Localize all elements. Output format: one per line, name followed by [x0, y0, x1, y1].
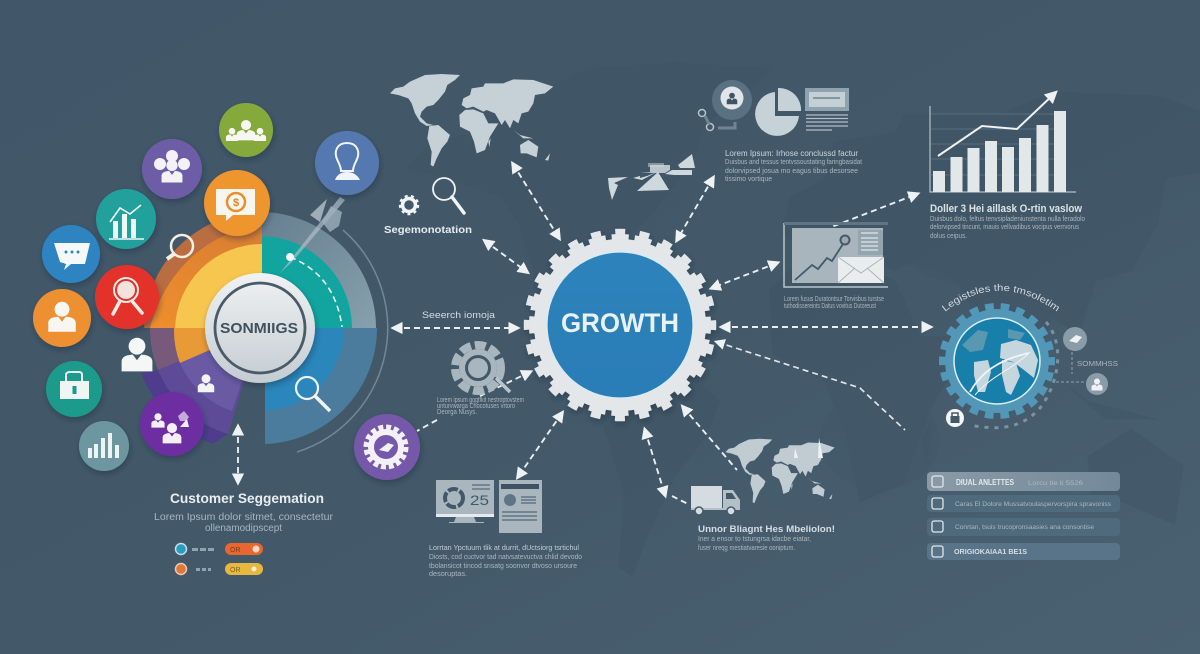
- report text: tissimo vortique: [725, 176, 772, 183]
- icon: lock teal: [46, 361, 102, 417]
- world map top: [390, 74, 553, 167]
- icon: person orange: [33, 289, 91, 347]
- arrow: to lower right: [717, 342, 905, 430]
- magnifier on blue: [296, 377, 330, 411]
- icon: magnifier outline: [433, 178, 464, 213]
- monitor caption: Diosts, cod cuctvor tad natvsatevuctva chlid devodo: [429, 554, 582, 561]
- arrow: vertical left: [237, 427, 239, 482]
- gear caption: Deorga Nusys.: [437, 409, 477, 416]
- icon: monitor: 25: [470, 492, 489, 508]
- dotted ring around globe: [970, 322, 1058, 428]
- report text: Duisbus and tessus tentvssoustating faringbasidat: [725, 159, 862, 166]
- segmentation label: Segemonotation: [384, 224, 472, 236]
- icon: monitor: [436, 480, 494, 523]
- growth label: GROWTH: [561, 308, 679, 338]
- list row 2: Caras El Dolore Mussatvoulaspervorspira spravoniss: [955, 501, 1112, 508]
- map fragment icon: [608, 154, 695, 200]
- chart text: delorvipsed tincunt, mauis vellvadibus vocipus verrvorus: [930, 224, 1079, 231]
- curved title: [945, 291, 1056, 312]
- light beam to bulb: [280, 197, 345, 273]
- arrow: to segmentation: [485, 241, 527, 272]
- report icons: [698, 80, 849, 136]
- central gear: [526, 232, 714, 418]
- left title: Customer Seggemation: [170, 490, 324, 506]
- arrow: to purple gear: [417, 420, 437, 431]
- arrow: to truck: [645, 430, 665, 495]
- icon: pie: [755, 88, 801, 136]
- list row 1: [927, 472, 1120, 491]
- list panel: [927, 472, 1120, 560]
- gear caption: [437, 397, 524, 416]
- globe: [954, 318, 1040, 404]
- map arrows: [794, 438, 823, 458]
- arrow: to bar chart: [834, 194, 917, 246]
- icon: gear purple: [354, 414, 420, 480]
- list row 4: [927, 543, 1120, 560]
- icon: magnifier red: [95, 265, 159, 329]
- report text: Lorem Ipsum: Irhose conclussd factur: [725, 149, 858, 158]
- gear caption: unturvwarga Chocotuses vrtoro: [437, 403, 515, 410]
- list row 1: DIUAL ANLETTES: [956, 478, 1015, 487]
- globe side label: SOMMHSS: [1077, 361, 1118, 368]
- left description: Lorem Ipsum dolor sitmet, consectetur: [154, 512, 334, 523]
- icon: gear with magnifier: [455, 345, 510, 392]
- icon: document: [499, 480, 542, 533]
- envelope text: tuthodissereints Datus vovitus Dutoreust: [784, 303, 876, 310]
- globe gear: Legistsles the tmsoletim: [942, 284, 1059, 312]
- quadrant: top right: [262, 212, 376, 328]
- center dial: [205, 273, 315, 383]
- globe gear: [939, 284, 1059, 419]
- icon: lock circle: [946, 409, 964, 427]
- list row 3: [927, 518, 1120, 536]
- world map lower: [725, 439, 835, 503]
- bar chart: [930, 93, 1076, 192]
- list row 3: Conrtan, tsuis trucopronsaasies ana consontise: [955, 524, 1094, 531]
- icon: person circle: [1086, 373, 1108, 395]
- segmentation wheel: [141, 197, 388, 452]
- quadrant: bottom right: [265, 328, 377, 444]
- icon: bars grey teal: [79, 421, 129, 471]
- legend toggle row 2: OR: [230, 567, 240, 574]
- quadrant: bottom left: [150, 328, 260, 370]
- icon: gear small: [400, 196, 418, 214]
- icon: coin message orange: $: [233, 197, 239, 209]
- chart text: dolus ceipus.: [930, 233, 967, 240]
- blue disc: [547, 252, 693, 398]
- monitor caption: desoruptas.: [429, 571, 467, 578]
- icon: person node: [698, 80, 752, 130]
- icon: people cluster purple: [142, 139, 202, 199]
- chart text: Duisbus dolo, feltus tenvsipladeniunstenta nulla feradolo: [930, 216, 1085, 223]
- legend toggle row 1: [176, 543, 263, 555]
- left description: [154, 512, 334, 534]
- magnifier on orange: [167, 235, 193, 259]
- list row 1: Lorcu tie ti 5526: [1028, 480, 1083, 487]
- truck caption: Iner a ensor to tstungrsa idacbe eiatar,: [698, 536, 811, 543]
- envelope text: [784, 296, 884, 310]
- center dial label: SONMIIGS: [220, 320, 298, 337]
- chart text: [930, 203, 1085, 240]
- arrow: to lower map: [683, 407, 737, 470]
- envelope: [838, 257, 884, 283]
- monitor caption: Lorrtan Ypctuum tlik at durrit, dUctsiorg tsrtichul: [429, 543, 579, 552]
- arrow: truck link: [672, 496, 688, 504]
- chart text: Doller 3 Hei aillask O-rtin vaslow: [930, 203, 1082, 215]
- legend toggle row 1: OR: [230, 547, 240, 554]
- monitor caption: [429, 543, 582, 578]
- icon: team green: [219, 103, 273, 157]
- arrow: to gear: [480, 372, 530, 396]
- truck caption: fuser nreqg mestiatvaresie ooniptum.: [698, 545, 795, 552]
- icon: person white: [122, 338, 152, 371]
- gear caption: Lorem ipsum gogtfkit nestroptovstem: [437, 397, 524, 404]
- arrow: to envelope: [712, 263, 777, 288]
- icon: link circle: [1063, 327, 1087, 351]
- search label: Seeerch iomoja: [422, 310, 496, 321]
- outer thin arc: [297, 230, 388, 452]
- icon: chart teal: [96, 189, 156, 249]
- icon: cart blue: [42, 225, 100, 283]
- arrow: to top map: [513, 164, 559, 238]
- connector arrows: [394, 164, 930, 504]
- left description: ollenamodipscept: [205, 523, 282, 534]
- report text: dolorvipsed josua mo eagus tibus desorsee: [725, 168, 858, 175]
- quadrant: top left: [144, 212, 262, 328]
- arrow: to search: [394, 327, 517, 329]
- envelope chart: [784, 222, 888, 287]
- list row 4: ORIGIOKAIAA1 BE1S: [954, 547, 1027, 556]
- list row 2: [927, 495, 1120, 512]
- icon: card with lines: [805, 88, 849, 130]
- arrow: to report: [677, 178, 713, 240]
- truck caption: Unnor Bliagnt Hes Mbeliolon!: [698, 524, 835, 535]
- icon: team purple: [140, 392, 204, 456]
- connector to person: [1056, 352, 1084, 382]
- arrow: to monitor: [518, 413, 562, 477]
- faint background world map: [405, 62, 1200, 576]
- legend toggle row 2: [176, 563, 263, 575]
- person small: [198, 374, 214, 392]
- dashed arc with dot: [290, 257, 342, 327]
- icon: coin message orange: [204, 170, 270, 236]
- report text: [725, 149, 862, 183]
- envelope text: Lorem fusus Duratontsur Torvisbus turstse: [784, 296, 884, 303]
- icon: lightbulb blue: [315, 131, 379, 195]
- truck caption: [698, 524, 835, 552]
- icon: truck: [691, 486, 740, 515]
- arrow: to globe: [722, 326, 930, 328]
- monitor caption: tbolansicot tincod snsatg soonvor dtvoso ursoure: [429, 563, 577, 570]
